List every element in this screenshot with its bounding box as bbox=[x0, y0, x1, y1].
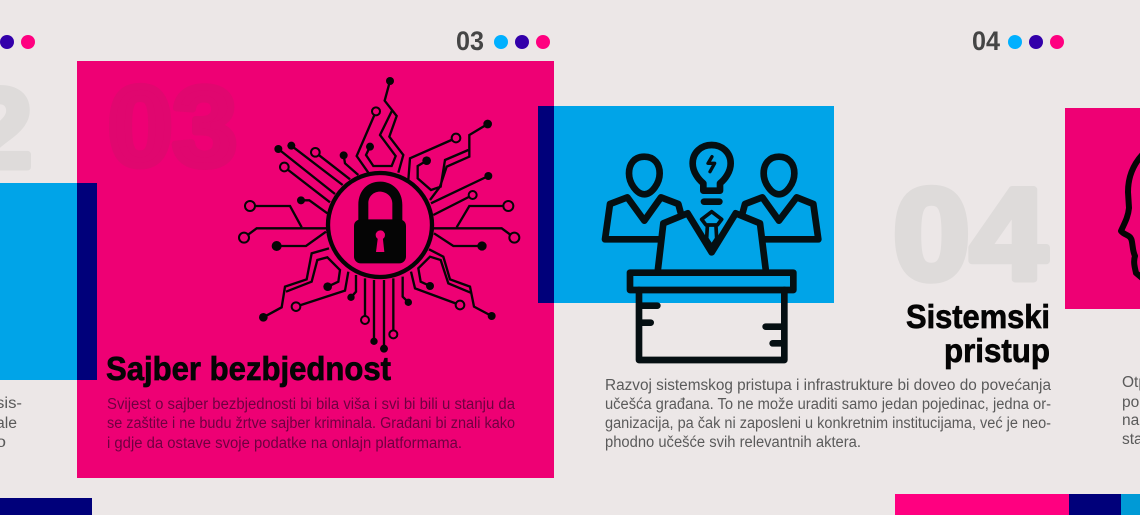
heading: Sajber bezbjednost: Sajber bezbjednost bbox=[106, 350, 391, 387]
text block: Sajber bezbjednost description: i gdje da ostave svoje podatke na onlajn platformama. bbox=[107, 435, 462, 452]
centre person bbox=[658, 212, 766, 272]
text block: Sajber bezbjednost description bbox=[107, 396, 515, 452]
text block: cropped left column bbox=[0, 395, 22, 451]
bottom left navy bar bbox=[0, 498, 92, 515]
light bulb bbox=[693, 145, 731, 202]
text block: Sajber bezbjednost description: se zaštite i ne budu žrtve sajber kriminala. Građani bi znali kako bbox=[107, 415, 515, 432]
panel: magenta block right bbox=[1065, 108, 1140, 309]
page marker 03: 03 bbox=[456, 26, 484, 56]
text block: cropped right column bbox=[1122, 374, 1140, 448]
panel: blue block left bbox=[0, 183, 97, 380]
page marker 04 bbox=[972, 26, 1064, 56]
bottom right colour bar bbox=[895, 494, 1140, 515]
text block: Sistemski pristup description bbox=[605, 377, 1051, 451]
icon: head outline bbox=[1121, 155, 1140, 278]
navy strip center bbox=[538, 106, 554, 303]
right person bbox=[743, 157, 818, 239]
text block: Sistemski pristup description: učešća građana. To ne može uraditi samo jedan pojedinac, jedna or- bbox=[605, 396, 1051, 413]
desk bbox=[630, 273, 793, 360]
heading: Sistemski pristup: Sistemski bbox=[906, 298, 1050, 335]
text block: cropped right column: po bbox=[1122, 394, 1139, 411]
panel: blue block center bbox=[538, 106, 834, 303]
page marker 04: 04 bbox=[972, 26, 1000, 56]
text block: cropped right column: na bbox=[1122, 412, 1140, 429]
left person bbox=[605, 157, 681, 239]
text block: Sistemski pristup description: ganizacija, pa čak ni zaposleni u konkretnim institucijama, već je neo- bbox=[605, 415, 1051, 432]
page marker 03 bbox=[456, 26, 550, 56]
text block: Sistemski pristup description: phodno učešće svih relevantnih aktera. bbox=[605, 434, 861, 451]
heading: Sistemski pristup: pristup bbox=[944, 332, 1050, 369]
icon: padlock with circuit traces bbox=[239, 77, 519, 353]
navy strip left bbox=[77, 183, 97, 380]
text block: Sajber bezbjednost description: Svijest o sajber bezbjednosti bi bila viša i svi bi bili u stanju da bbox=[107, 396, 515, 413]
heading: Sistemski pristup bbox=[906, 298, 1050, 369]
page marker left dots bbox=[0, 35, 35, 49]
large faded number 04: 04 bbox=[893, 161, 1047, 307]
text block: Sistemski pristup description: Razvoj sistemskog pristupa i infrastrukture bi doveo do povećanja bbox=[605, 377, 1051, 394]
icon: team with light bulb at desk bbox=[605, 145, 818, 360]
panel: magenta block Sajber bezbjednost bbox=[77, 61, 554, 478]
large faded number 03: 03 bbox=[108, 64, 237, 189]
